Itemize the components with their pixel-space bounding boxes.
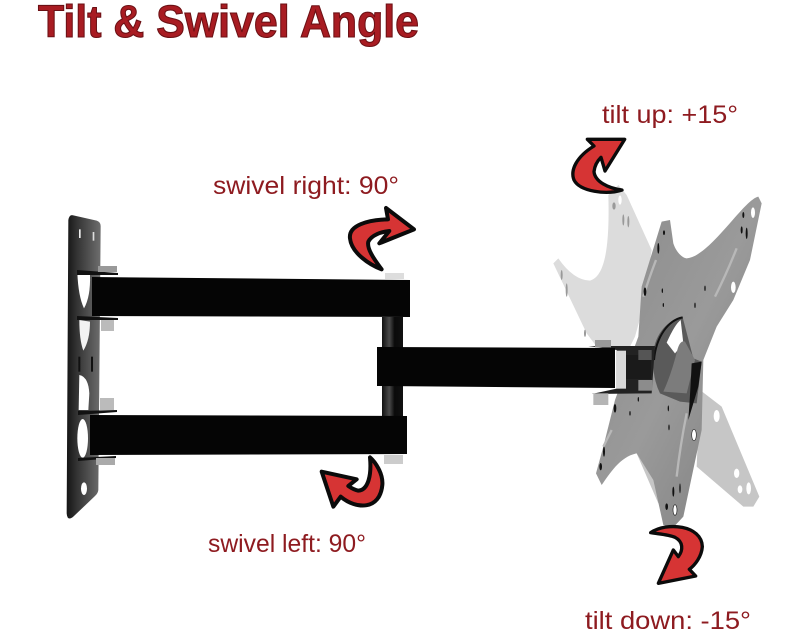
- label: tilt up: tilt up: +15°: [602, 101, 738, 129]
- label: swivel right: swivel right: 90°: [213, 172, 399, 200]
- forearm: [377, 347, 615, 388]
- ghost holes: [561, 195, 751, 494]
- arrow: swivel left: [322, 457, 382, 507]
- pivot post: [382, 317, 403, 416]
- tilted plate ghost: upper: [553, 185, 652, 347]
- plate holes: [599, 207, 755, 515]
- tilt hinge: [653, 317, 702, 403]
- tilted plate ghost: lower: [637, 390, 759, 507]
- arrow: tilt down: [651, 527, 702, 583]
- plate ridges: [603, 248, 737, 477]
- main plate: [596, 197, 762, 527]
- swivel bracket: [588, 346, 655, 394]
- arrow: tilt up: [573, 139, 625, 192]
- upper arm: [77, 266, 410, 331]
- label: swivel left: swivel left: 90°: [208, 530, 366, 558]
- VESA plate and bracket: [553, 185, 762, 527]
- arrow: swivel right: [350, 208, 414, 269]
- lower arm: [78, 398, 407, 465]
- wall plate: [67, 215, 101, 519]
